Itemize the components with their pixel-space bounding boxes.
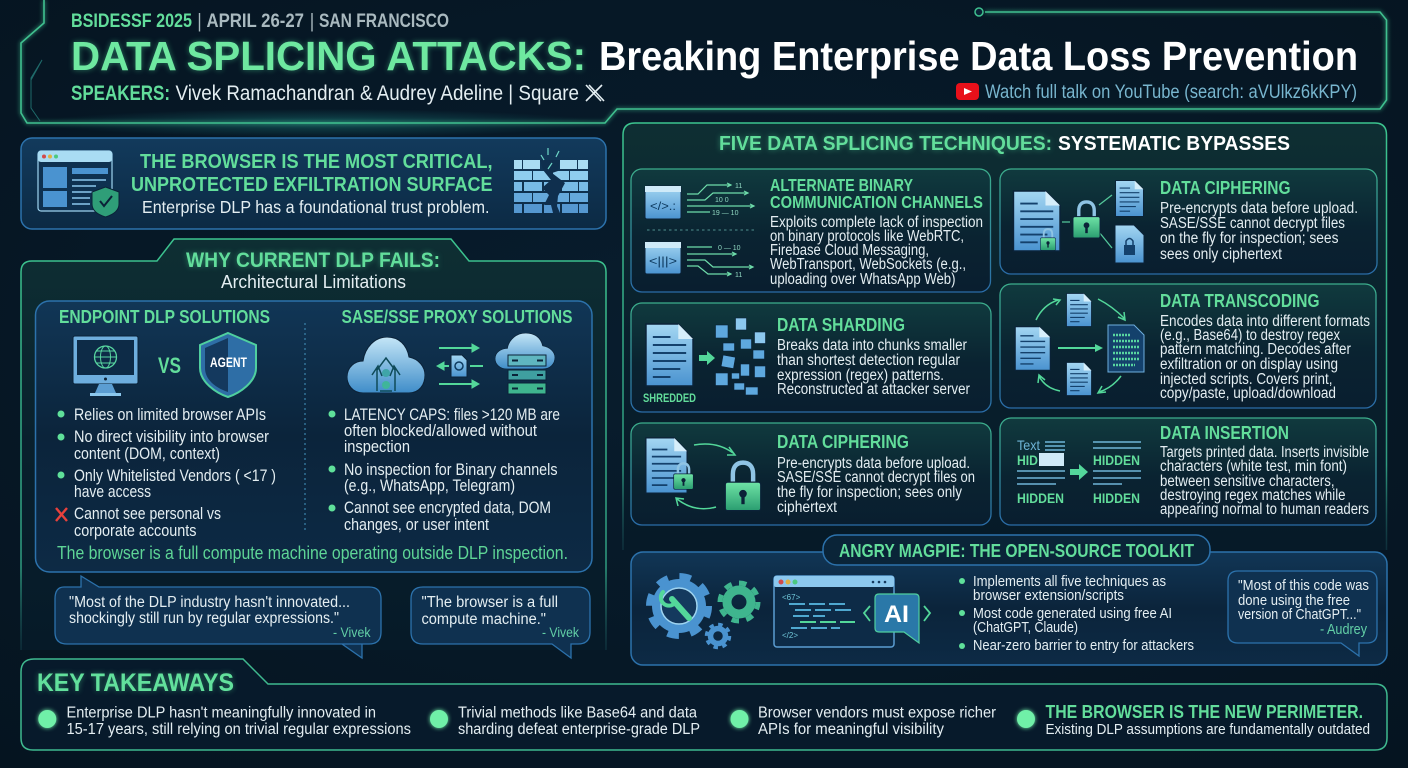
- toolkit bullets: Near-zero barrier to entry for attackers: [973, 637, 1194, 654]
- title: DATA SPLICING ATTACKS:: [71, 33, 586, 79]
- panel: angry magpie toolkit: [631, 535, 1387, 665]
- bullets: inspection: [344, 438, 410, 456]
- body: on binary protocols like WebRTC,: [770, 228, 964, 245]
- conclusion line: The browser is a full compute machine operating outside DLP inspection.: [57, 543, 568, 563]
- body: Pre-encrypts data before upload.: [777, 455, 970, 472]
- body: sees only ciphertext: [1160, 246, 1283, 263]
- icon: binary channels: 11: [735, 272, 742, 279]
- column: SASE/SSE proxy: SASE/SSE PROXY SOLUTIONS: [342, 306, 572, 327]
- vs label: VS: [158, 353, 181, 378]
- body: [1160, 313, 1370, 402]
- heading: DATA TRANSCODING: [1160, 290, 1320, 311]
- quote: regular expressions: shockingly still run by regular expressions.": [69, 610, 339, 627]
- body: than shortest detection regular: [777, 352, 960, 369]
- bullets: Only Whitelisted Vendors ( <17 ): [74, 467, 276, 485]
- bullets: No inspection for Binary channels: [344, 461, 558, 479]
- body: expression (regex) patterns.: [777, 367, 944, 384]
- icon: cloud server: [495, 333, 555, 394]
- icon: encrypted documents: [1013, 181, 1144, 263]
- icon: AI bubble: [864, 594, 930, 643]
- bullets: No direct visibility into browser: [74, 428, 269, 446]
- icon: code window: <67>: [782, 593, 801, 602]
- conference line: BSIDESSF 2025: [71, 10, 192, 32]
- icon: gears: [650, 576, 758, 648]
- takeaway 2: sharding defeat enterprise-grade DLP: [458, 721, 700, 738]
- conference line: APRIL 26-27: [206, 10, 304, 32]
- body: [770, 214, 983, 288]
- takeaway 4: THE BROWSER IS THE NEW PERIMETER.: [1046, 701, 1363, 722]
- body: injected scripts. Covers print,: [1160, 371, 1332, 388]
- icon: cloud with tree: [347, 337, 425, 393]
- card: alternate binary channels: [631, 169, 990, 292]
- bullets: [328, 406, 560, 534]
- heading: COMMUNICATION CHANNELS: [770, 192, 983, 212]
- quote: compute machine: "The browser is a full: [422, 594, 558, 611]
- icon: agent shield: AGENT: [210, 354, 247, 370]
- bullets: Cannot see encrypted data, DOM: [344, 499, 551, 517]
- quote: compute machine: compute machine.": [422, 611, 546, 628]
- takeaway 2: Trivial methods like Base64 and data: [458, 704, 697, 722]
- heading: FIVE DATA SPLICING TECHNIQUES:: [719, 133, 1052, 155]
- bullets: often blocked/allowed without: [344, 422, 537, 440]
- body: WebTransport, WebSockets (e.g.,: [770, 256, 966, 273]
- card: data transcoding: [1000, 284, 1376, 408]
- bullets: LATENCY CAPS: files >120 MB are: [344, 406, 560, 424]
- icon: hidden text: [1017, 437, 1141, 506]
- icon: binary channels: </>.:: [650, 199, 676, 213]
- icon: agent shield: [200, 333, 256, 397]
- takeaway 2: [430, 704, 700, 738]
- takeaway 4: Existing DLP assumptions are fundamentally outdated: [1046, 721, 1370, 738]
- body: copy/paste, upload/download: [1160, 385, 1336, 402]
- body: appearing normal to human readers: [1160, 501, 1369, 518]
- icon: shredded document: [643, 318, 766, 405]
- takeaway 1: [38, 704, 411, 738]
- icon: hidden text: HID: [1017, 452, 1038, 468]
- body: Firebase Cloud Messaging,: [770, 242, 929, 259]
- conference line: SAN FRANCISCO: [319, 10, 449, 32]
- icon: hidden text: HIDDEN: [1093, 452, 1140, 468]
- icon: hidden text: HIDDEN: [1017, 490, 1064, 506]
- quote: compute machine: - Vivek: [542, 624, 580, 640]
- card: data sharding: [631, 303, 991, 412]
- card: data insertion: [1000, 418, 1376, 525]
- takeaway 3: [730, 704, 996, 738]
- conference line: |: [310, 10, 314, 32]
- heading: DATA INSERTION: [1160, 422, 1289, 443]
- icon: AI bubble: AI: [884, 601, 909, 628]
- panel: why current DLP fails: [21, 239, 606, 658]
- body: Encodes data into different formats: [1160, 313, 1370, 330]
- column: endpoint DLP: ENDPOINT DLP SOLUTIONS: [59, 306, 270, 327]
- body: [1160, 444, 1369, 518]
- header panel: [21, 0, 1386, 123]
- toolkit title pill: ANGRY MAGPIE: THE OPEN-SOURCE TOOLKIT: [839, 541, 1194, 561]
- body: [777, 455, 975, 516]
- heading: DATA CIPHERING: [1160, 177, 1290, 198]
- headline: THE BROWSER IS THE MOST CRITICAL,: [140, 151, 492, 173]
- icon: binary channels: [645, 183, 755, 279]
- quote: Audrey: [1228, 571, 1377, 656]
- icon: binary channels: 10 0: [715, 197, 729, 204]
- quote: regular expressions: [55, 576, 381, 658]
- quote: Audrey: version of ChatGPT...": [1238, 606, 1361, 623]
- heading: [770, 175, 983, 212]
- icon: binary channels: 19 — 10: [712, 210, 739, 217]
- icon: broken brick wall: [514, 148, 588, 213]
- icon: binary channels: <|||>: [649, 254, 677, 268]
- bullets: Cannot see personal vs: [74, 505, 221, 523]
- body: destroying regex matches while: [1160, 487, 1346, 504]
- bullets: content (DOM, context): [74, 445, 220, 463]
- body: [1160, 200, 1358, 263]
- bullets: (e.g., WhatsApp, Telegram): [344, 477, 515, 495]
- toolkit bullets: (ChatGPT, Claude): [973, 619, 1078, 636]
- bullets: have access: [74, 483, 151, 501]
- conference line: [71, 10, 449, 32]
- quote: compute machine: [411, 587, 590, 658]
- takeaway 3: APIs for meaningful visibility: [758, 721, 944, 738]
- body: pattern matching. Decodes after: [1160, 341, 1351, 358]
- quote: regular expressions: - Vivek: [333, 624, 371, 640]
- quote: regular expressions: "Most of the DLP industry hasn't innovated...: [69, 594, 350, 611]
- title: Breaking Enterprise Data Loss Prevention: [599, 33, 1358, 79]
- body: (e.g., Base64) to destroy regex: [1160, 327, 1340, 344]
- body: Targets printed data. Inserts invisible: [1160, 444, 1369, 461]
- title: [71, 33, 1358, 79]
- quote: Audrey: "Most of this code was: [1238, 577, 1369, 594]
- icon: document and padlock: [646, 438, 761, 511]
- body: Pre-encrypts data before upload.: [1160, 200, 1358, 217]
- toolkit bullets: browser extension/scripts: [973, 587, 1124, 604]
- icon: shredded document: SHREDDED: [643, 391, 696, 405]
- heading: [719, 133, 1290, 155]
- takeaway 3: Browser vendors must expose richer: [758, 704, 996, 722]
- icon: monitor: [73, 336, 138, 396]
- bullets: [56, 406, 276, 540]
- body: between sensitive characters,: [1160, 473, 1334, 490]
- heading: SYSTEMATIC BYPASSES: [1058, 133, 1290, 155]
- subhead: Enterprise DLP has a foundational trust problem.: [142, 197, 490, 217]
- takeaway 1: Enterprise DLP hasn't meaningfully innovated in: [66, 704, 376, 722]
- quote: Audrey: - Audrey: [1320, 622, 1368, 638]
- bullets: changes, or user intent: [344, 516, 489, 534]
- icon: code window: </2>: [782, 631, 798, 640]
- icon: transfer arrows: [437, 344, 483, 388]
- heading: ALTERNATE BINARY: [770, 175, 913, 195]
- body: uploading over WhatsApp Web): [770, 271, 956, 288]
- quote: Audrey: done using the free: [1238, 592, 1350, 609]
- icon: code window: [774, 576, 894, 647]
- toolkit bullets: [959, 573, 1194, 654]
- body: SASE/SSE cannot decrypt files on: [777, 469, 975, 486]
- icon: binary channels: 0 — 10: [718, 245, 741, 252]
- body: the fly for inspection; sees only: [777, 484, 962, 501]
- takeaway 1: 15-17 years, still relying on trivial regular expressions: [66, 721, 411, 738]
- body: SASE/SSE cannot decrypt files: [1160, 215, 1345, 232]
- takeaway 4: [1017, 701, 1370, 738]
- body: Breaks data into chunks smaller: [777, 337, 967, 354]
- icon: binary channels: 11: [735, 183, 742, 190]
- toolkit bullets: Implements all five techniques as: [973, 573, 1166, 590]
- card: data ciphering (left): [631, 423, 991, 525]
- speakers: SPEAKERS:: [71, 82, 170, 105]
- heading: DATA SHARDING: [777, 314, 905, 335]
- icon: hidden text: HIDDEN: [1093, 490, 1140, 506]
- body: [777, 337, 970, 398]
- column: endpoint DLP: [56, 306, 276, 540]
- speakers: Vivek Ramachandran & Audrey Adeline | Square: [176, 82, 579, 105]
- subheading: Architectural Limitations: [221, 272, 406, 292]
- body: Exploits complete lack of inspection: [770, 214, 983, 231]
- body: ciphertext: [777, 499, 838, 516]
- toolkit title pill: [823, 535, 1210, 565]
- heading: DATA CIPHERING: [777, 431, 909, 452]
- panel: five techniques: [623, 123, 1387, 665]
- headline: [131, 151, 492, 196]
- icon: browser with shield: [38, 151, 119, 217]
- bullets: Relies on limited browser APIs: [74, 406, 266, 424]
- body: Reconstructed at attacker server: [777, 381, 970, 398]
- banner: browser surface: [21, 138, 606, 229]
- column: SASE/SSE proxy: [328, 306, 572, 534]
- bullets: corporate accounts: [74, 522, 196, 540]
- heading: WHY CURRENT DLP FAILS:: [186, 249, 440, 272]
- body: characters (white test, min font): [1160, 458, 1347, 475]
- icon: transcoding cycle: [1015, 294, 1144, 395]
- body: on the fly for inspection; sees: [1160, 230, 1339, 247]
- icon: hidden text: Text: [1017, 437, 1040, 453]
- panel: key takeaways: [21, 659, 1387, 750]
- conference line: |: [198, 10, 201, 32]
- body: exfiltration or on display using: [1160, 356, 1338, 373]
- card: data ciphering (right): [1000, 169, 1377, 274]
- headline: UNPROTECTED EXFILTRATION SURFACE: [131, 174, 492, 196]
- heading: KEY TAKEAWAYS: [37, 669, 234, 697]
- toolkit bullets: Most code generated using free AI: [973, 605, 1172, 622]
- comparison panel: [36, 301, 592, 572]
